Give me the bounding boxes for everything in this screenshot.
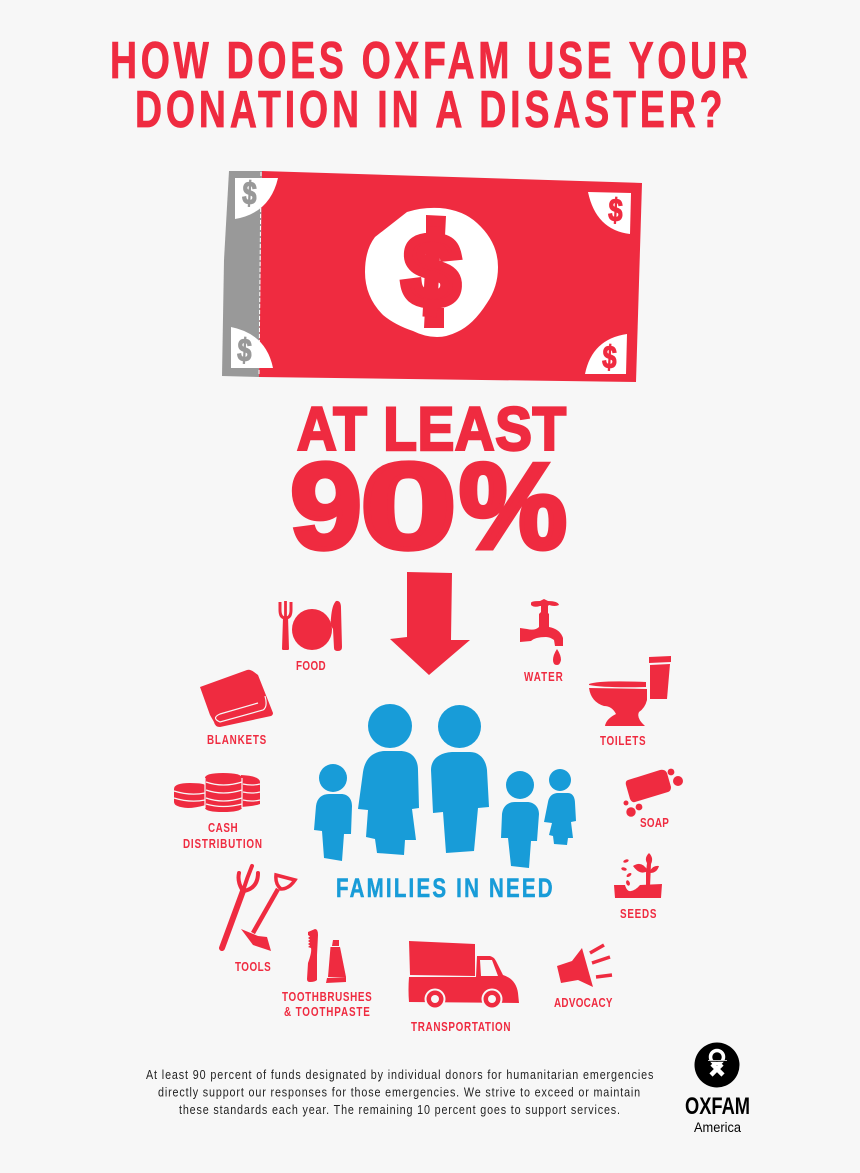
- label: blankets: BLANKETS: [207, 734, 267, 747]
- heading: 90 percent: 0: [360, 438, 457, 574]
- title: DONATION IN A DISASTER?: [135, 80, 723, 138]
- corner top right: [588, 192, 631, 234]
- heading: at least: AT LEAST: [297, 395, 566, 464]
- label: families in need: FAMILIES IN NEED: [336, 873, 553, 904]
- bill body: red 90 percent: [259, 171, 642, 382]
- central dollar sign: $: [401, 214, 462, 328]
- logo wordmark: OXFAM: [685, 1093, 750, 1120]
- text block: footnote: these standards each year. The remaining 10 percent goes to support services.: [179, 1102, 620, 1117]
- person: father: [431, 705, 489, 853]
- corner bottom left: $: [236, 333, 253, 369]
- label: toilets: TOILETS: [600, 735, 646, 748]
- label: transportation: TRANSPORTATION: [411, 1021, 511, 1034]
- label: water: WATER: [524, 671, 563, 684]
- logo mark: [694, 1042, 740, 1088]
- corner bottom left: [231, 327, 273, 369]
- corner top left: $: [241, 176, 258, 212]
- title: [110, 31, 748, 138]
- person: small girl: [544, 769, 576, 845]
- central medallion: [365, 208, 498, 337]
- icon: cash distribution: [174, 773, 262, 851]
- arrow: [390, 572, 470, 675]
- title: HOW DOES OXFAM USE YOUR: [110, 31, 748, 89]
- label: cash distribution: DISTRIBUTION: [183, 838, 262, 851]
- icon: soap: [624, 769, 683, 830]
- label: tools: TOOLS: [235, 961, 271, 974]
- label: toothbrushes and toothpaste: & TOOTHPASTE: [284, 1006, 370, 1019]
- logo subtitle: America: [694, 1120, 741, 1135]
- icon: blankets: [200, 670, 273, 747]
- label: toothbrushes and toothpaste: [282, 991, 372, 1019]
- text block: footnote: directly support our responses for those emergencies. We strive to exceed or maintain: [158, 1085, 640, 1100]
- bill stub: grey 10 percent: [222, 171, 262, 377]
- label: food: FOOD: [296, 660, 326, 673]
- icon: toilets: [589, 656, 671, 748]
- logo: Oxfam America: [685, 1042, 750, 1135]
- label: cash distribution: CASH: [208, 822, 238, 835]
- icon: transportation truck: [408, 941, 519, 1034]
- illustration: family: [314, 704, 576, 868]
- label: advocacy: ADVOCACY: [554, 997, 613, 1010]
- heading: 90 percent: [290, 438, 567, 574]
- icon: tools: [222, 866, 295, 974]
- label: cash distribution: [183, 822, 262, 851]
- icon: seeds: [614, 853, 662, 921]
- corner top right: $: [607, 193, 624, 229]
- corner top left: [235, 176, 278, 219]
- icon: water: [520, 599, 563, 684]
- text block: footnote: At least 90 percent of funds designated by individual donors for humanitarian emergencies: [146, 1067, 653, 1082]
- icon: advocacy megaphone: [554, 945, 613, 1010]
- heading: 90 percent: 9: [290, 438, 362, 574]
- icon: toothbrush and toothpaste: [282, 929, 372, 1019]
- label: seeds: SEEDS: [620, 908, 657, 921]
- person: right child: [501, 771, 539, 868]
- text block: footnote: [146, 1067, 653, 1117]
- label: toothbrushes and toothpaste: TOOTHBRUSHES: [282, 991, 372, 1004]
- corner bottom right: [585, 334, 627, 376]
- label: soap: SOAP: [640, 817, 669, 830]
- person: mother: [358, 704, 419, 855]
- heading: 90 percent: %: [459, 438, 567, 574]
- icon: dollar bill: [222, 171, 642, 382]
- icon: food: [280, 601, 342, 673]
- person: left child: [314, 764, 352, 861]
- corner bottom right: $: [601, 340, 618, 376]
